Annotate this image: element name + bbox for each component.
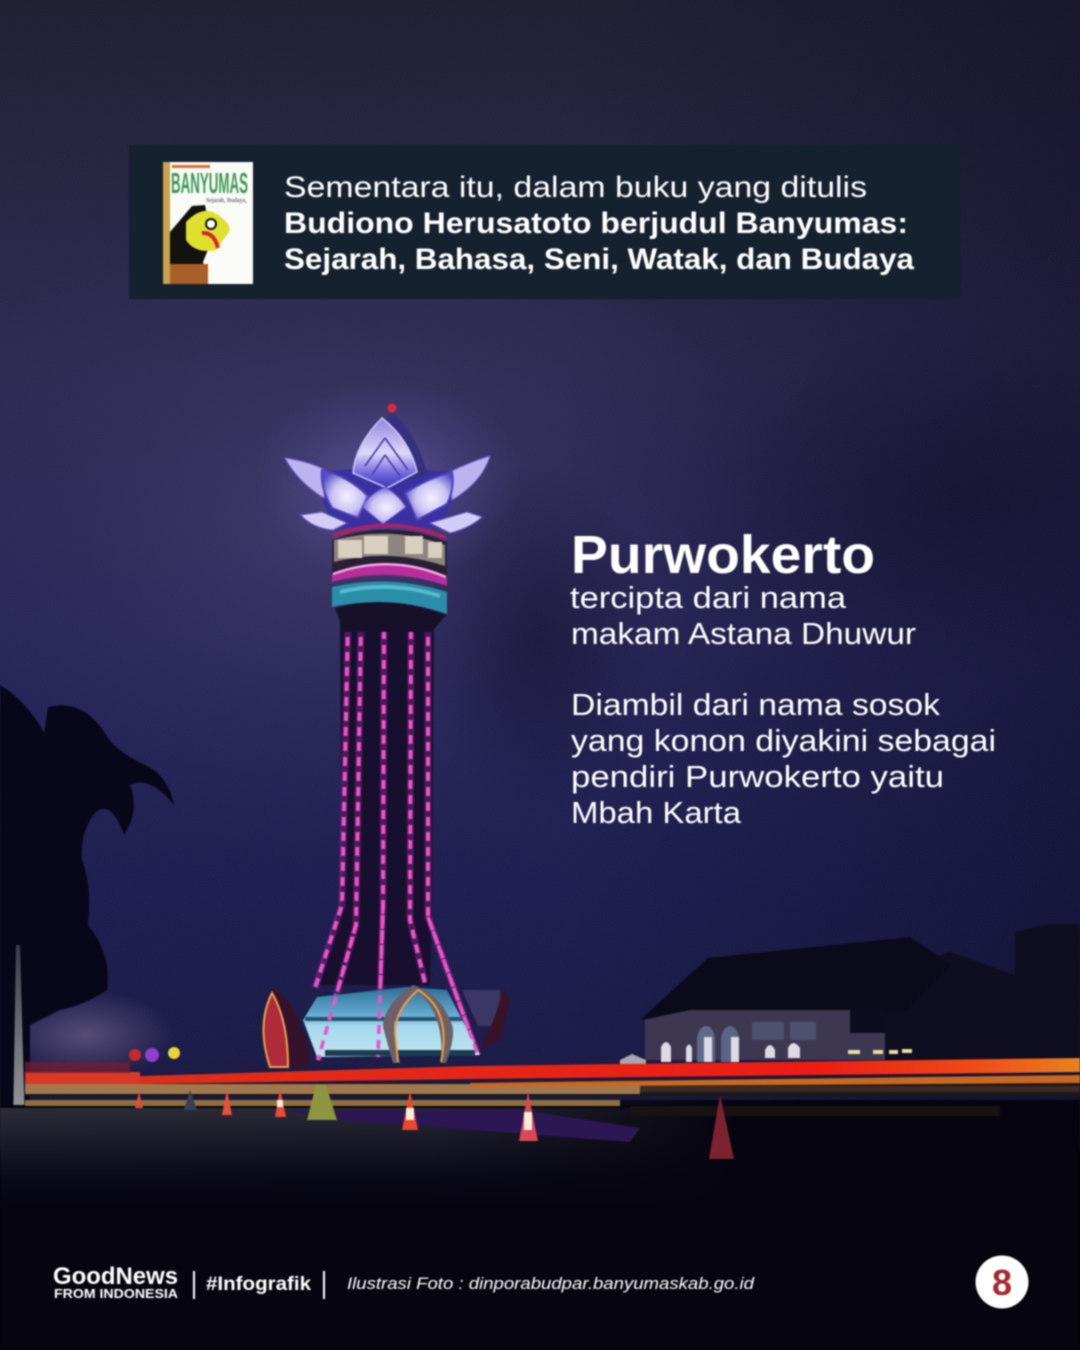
text block: founder: Diambil dari nama sosok bbox=[571, 687, 941, 722]
panel text bbox=[284, 171, 914, 276]
strip glow bbox=[315, 615, 478, 1060]
teal deck band bbox=[332, 582, 447, 614]
arches bbox=[697, 1026, 715, 1062]
red light trail bbox=[25, 1058, 1080, 1084]
right dark arch bbox=[480, 988, 510, 1048]
observation deck bbox=[332, 525, 447, 632]
text block: name origin bbox=[570, 580, 916, 651]
tower shaft bbox=[320, 622, 434, 985]
lotus crown bbox=[285, 404, 490, 533]
pink deck ring bbox=[332, 564, 447, 586]
dark trees behind building bbox=[885, 924, 1080, 1062]
base glass pavilion bbox=[263, 905, 510, 1068]
logo GoodNews: GoodNews bbox=[53, 1263, 178, 1290]
deck underside bbox=[335, 602, 446, 632]
guard rail bbox=[25, 1083, 1080, 1096]
left inner petal bbox=[322, 470, 368, 518]
text block: founder: Mbah Karta bbox=[571, 795, 742, 830]
page number badge: 8 bbox=[992, 1262, 1012, 1303]
left arch bbox=[264, 988, 309, 1068]
back dark petal bbox=[386, 413, 427, 482]
photo credit: Ilustrasi Foto : dinporabudpar.banyumaskab.go.id bbox=[347, 1274, 755, 1293]
panel: book source bbox=[129, 145, 960, 299]
text block: founder bbox=[571, 687, 996, 830]
white figures bbox=[661, 1037, 800, 1062]
lotus backing bbox=[322, 465, 452, 528]
center petal bbox=[353, 418, 417, 488]
far right petal bbox=[450, 456, 490, 500]
panel text: Budiono Herusatoto berjudul Banyumas: bbox=[284, 207, 908, 240]
tower glow bbox=[253, 375, 523, 585]
grid frame right bbox=[462, 990, 500, 1026]
tower bbox=[253, 375, 523, 1068]
lower left petal bbox=[301, 512, 347, 530]
pink light strips bbox=[315, 615, 478, 1060]
palm trunk highlight bbox=[13, 945, 25, 1128]
footer bbox=[53, 1256, 1028, 1308]
hashtag: #Infografik bbox=[206, 1274, 311, 1295]
low city haze at horizon bbox=[0, 990, 175, 1080]
logo GoodNews: FROM INDONESIA bbox=[54, 1287, 178, 1301]
panel: book source: BANYUMAS bbox=[171, 168, 248, 200]
front center petal bbox=[362, 487, 406, 524]
text block: founder: yang konon diyakini sebagai bbox=[571, 723, 996, 758]
panel text: Sementara itu, dalam buku yang ditulis bbox=[284, 171, 867, 204]
small pavilion bbox=[620, 1054, 646, 1068]
far left petal bbox=[285, 458, 325, 498]
text block: founder: pendiri Purwokerto yaitu bbox=[571, 759, 944, 794]
right inner petal bbox=[405, 472, 453, 520]
cone row bbox=[135, 1085, 734, 1159]
building silhouette bbox=[620, 924, 1080, 1068]
book subtitle: Sejarah, Budaya, bbox=[206, 198, 247, 204]
road and guard rail bbox=[0, 1047, 1080, 1350]
lower right petal bbox=[430, 512, 482, 533]
roof bbox=[640, 937, 952, 1020]
wayang figure bbox=[170, 205, 230, 284]
heading: Purwokerto bbox=[571, 525, 875, 585]
asphalt bbox=[0, 1105, 1080, 1350]
text block: name origin: makam Astana Dhuwur bbox=[571, 616, 916, 651]
walls bbox=[645, 1010, 885, 1060]
center arch bbox=[383, 985, 453, 1063]
beacon bbox=[388, 404, 396, 412]
distant lights bbox=[168, 1047, 180, 1059]
panel text: Sejarah, Bahasa, Seni, Watak, dan Budaya bbox=[284, 243, 914, 276]
lit windows bbox=[848, 1049, 912, 1054]
text block: name origin: tercipta dari nama bbox=[570, 580, 847, 615]
palm tree silhouette bbox=[0, 685, 174, 1130]
page number badge bbox=[976, 1256, 1028, 1308]
deck roof ring bbox=[333, 525, 446, 538]
book cover bbox=[163, 162, 253, 284]
